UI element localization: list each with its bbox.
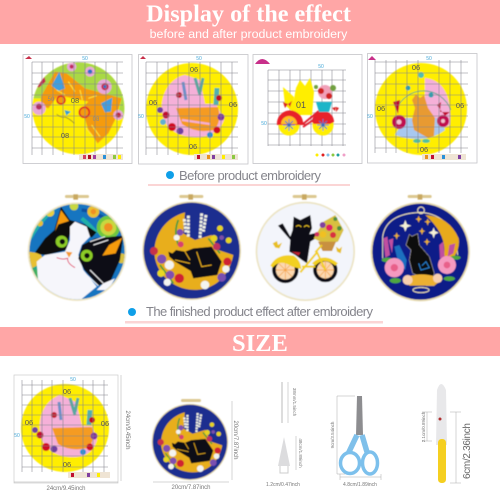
size: scissors: [330, 396, 381, 488]
panel: pattern cat on moon: 50: [196, 56, 202, 62]
size: needle: [282, 382, 297, 423]
size: pattern sheet: 24cm/9.45inch: [46, 486, 86, 492]
caption: finished embroidery: [125, 304, 383, 324]
size: threader: [266, 436, 303, 488]
size: pattern sheet: 24cm/9.45inch: [124, 410, 130, 450]
panel: pattern black cat in arch: 06: [456, 101, 464, 110]
size: pattern sheet: 06: [63, 460, 71, 469]
size: seam ripper: [421, 384, 473, 483]
panel: pattern cat on moon: 06: [229, 100, 237, 109]
hoop: black cat on moon embroidery: [140, 194, 243, 302]
panel: pattern cat on moon: 06: [189, 142, 197, 151]
size: pattern sheet: [14, 375, 130, 492]
size: scissors: 4.8cm/1.89inch: [343, 482, 377, 488]
panel: pattern cat face: 08: [71, 96, 79, 105]
panel: pattern black cat in arch: 06: [412, 63, 420, 72]
hoop: cat on bicycle embroidery: [256, 194, 355, 301]
subtitle: before and after product embroidery: [150, 27, 348, 41]
panel: pattern cat on moon: 06: [190, 65, 198, 74]
panel: pattern cat on moon: 50: [138, 114, 144, 120]
caption: before embroidery: [148, 168, 350, 186]
panel: pattern cat face: 50: [82, 56, 88, 62]
panel: pattern cat on moon: 06: [149, 98, 157, 107]
size: hoop: 20cm/7.87inch: [232, 420, 238, 460]
size band: [0, 327, 500, 357]
size: scissors: 9cm/3.54inch: [330, 421, 335, 448]
panel: pattern cat face: [23, 54, 132, 164]
title: Display of the effect: [146, 0, 351, 28]
panel: pattern black cat in arch: 50: [367, 114, 373, 120]
panel: pattern cat on moon: [138, 54, 248, 164]
size: seam ripper: 6cm/2.36inch: [462, 423, 473, 479]
size: threader: 1.2cm/0.47inch: [266, 482, 300, 488]
panel: pattern black cat in arch: 06: [377, 104, 385, 113]
panel: pattern cat on bicycle: 01: [296, 100, 306, 110]
panel: pattern cat on bicycle: 50: [261, 121, 267, 127]
panel: pattern cat face: 08: [61, 131, 69, 140]
size: needle: 38mm/1.5inch: [292, 388, 297, 417]
size: hoop: 20cm/7.87inch: [171, 485, 211, 491]
panel: pattern black cat in arch: 50: [426, 56, 432, 62]
size: pattern sheet: 50: [14, 433, 20, 439]
panel: pattern cat on bicycle: 50: [318, 64, 324, 70]
panel: pattern cat on bicycle: [253, 54, 362, 164]
size: pattern sheet: 06: [101, 419, 109, 428]
size: hoop: [150, 399, 238, 491]
size: seam ripper: 2.1cm/0.89inch: [421, 411, 426, 442]
hoop: cat face embroidery: [25, 194, 128, 302]
size: threader: 48cm/1.89inch: [298, 438, 303, 468]
size: pattern sheet: 06: [25, 418, 33, 427]
panel: pattern cat face: 08: [93, 117, 100, 123]
panel: pattern cat face: 50: [24, 114, 30, 120]
panel: pattern black cat in arch: [367, 54, 477, 163]
panel: pattern cat face: 50: [48, 97, 55, 103]
header band: [0, 0, 500, 44]
caption: before embroidery: Before product embroidery: [179, 168, 322, 183]
panel: pattern black cat in arch: 06: [420, 145, 428, 154]
size: pattern sheet: 06: [63, 387, 71, 396]
caption: finished embroidery: The finished product effect after embroidery: [146, 304, 374, 319]
hoop: black cat in arch embroidery: [366, 194, 473, 305]
size: pattern sheet: 50: [70, 377, 76, 383]
size heading: SIZE: [232, 330, 288, 357]
